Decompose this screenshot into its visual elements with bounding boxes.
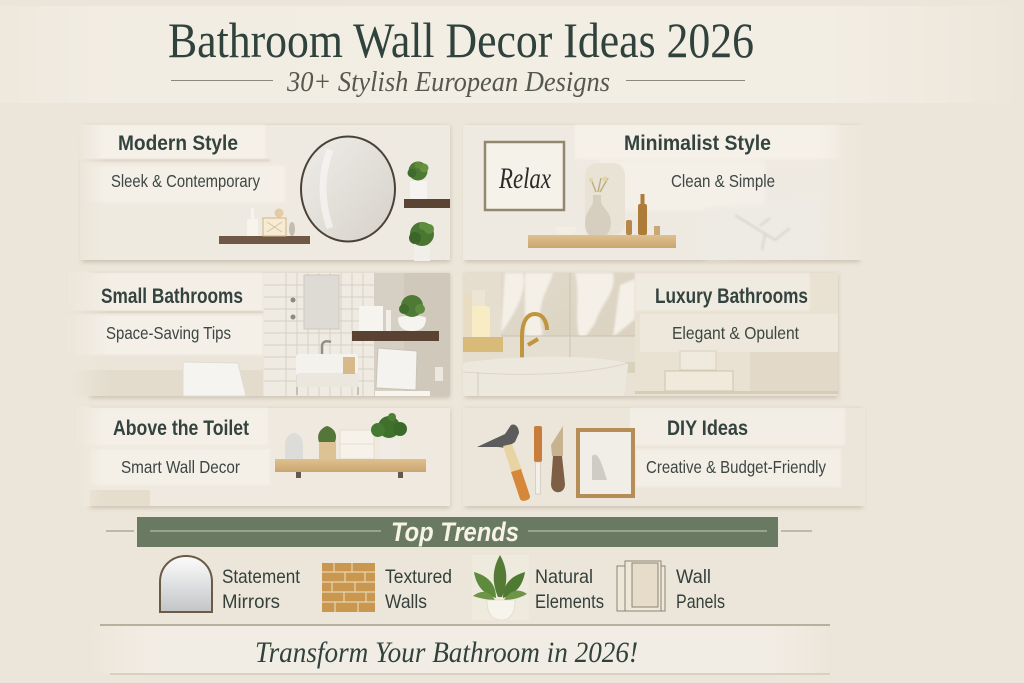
icon: chisel bbox=[534, 426, 542, 494]
icon: hammer bbox=[477, 424, 530, 501]
trend: textured walls: Walls bbox=[385, 591, 427, 613]
candle and gold tray bbox=[463, 290, 503, 352]
icon: white panel left bbox=[183, 362, 246, 396]
icon: arch mirror bbox=[160, 556, 212, 612]
tagline: Clean & Simple bbox=[671, 171, 775, 191]
footer band bbox=[90, 625, 830, 674]
tagline: Smart Wall Decor bbox=[121, 457, 240, 477]
heading: Luxury Bathrooms bbox=[655, 284, 808, 308]
tagline: Space-Saving Tips bbox=[106, 323, 231, 343]
heading: Minimalist Style bbox=[624, 131, 771, 155]
banner heading: Top Trends bbox=[391, 517, 519, 547]
trend: textured walls: Textured bbox=[385, 566, 452, 588]
icon: brick wall bbox=[322, 563, 375, 612]
trend: natural elements: Natural bbox=[535, 566, 593, 588]
heading: DIY Ideas bbox=[667, 416, 748, 440]
heading: Small Bathrooms bbox=[101, 284, 243, 308]
gold tap bbox=[522, 314, 547, 362]
heading: Above the Toilet bbox=[113, 416, 249, 440]
subtitle: 30+ Stylish European Designs bbox=[286, 66, 610, 98]
trend: statement mirrors: Statement bbox=[222, 566, 301, 588]
trend: statement mirrors bbox=[160, 556, 301, 613]
panel: modern style bbox=[80, 125, 450, 262]
icon: potted plant bbox=[472, 555, 529, 620]
title: Bathroom Wall Decor Ideas 2026 bbox=[168, 12, 754, 68]
shelf with plants bbox=[275, 413, 426, 478]
tap base bbox=[503, 362, 533, 367]
trend: natural elements bbox=[472, 555, 604, 620]
icon: round mirror bbox=[301, 136, 395, 242]
boxes bbox=[635, 351, 838, 394]
trend: textured walls bbox=[322, 563, 452, 613]
tagline: Sleek & Contemporary bbox=[111, 171, 260, 191]
section: top trends banner bbox=[106, 517, 812, 547]
trend: wall panels bbox=[617, 561, 725, 613]
tagline: Creative & Budget-Friendly bbox=[646, 457, 826, 477]
icon: top plant bbox=[408, 162, 428, 199]
icon: lower plant bbox=[409, 222, 434, 261]
shelf right bbox=[404, 199, 450, 208]
shelf bbox=[528, 235, 676, 248]
panel: above the toilet bbox=[78, 408, 450, 508]
bathroom scene bbox=[264, 273, 450, 396]
icon: vase and bottles bbox=[556, 176, 660, 235]
trend: natural elements: Elements bbox=[535, 591, 604, 613]
icon: relax frame bbox=[485, 142, 564, 210]
trend: wall panels: Panels bbox=[676, 591, 725, 613]
round bath bbox=[463, 357, 628, 396]
icon: knife bbox=[551, 426, 565, 492]
tagline: Elegant & Opulent bbox=[672, 323, 799, 343]
trend: statement mirrors: Mirrors bbox=[222, 591, 280, 613]
closing line: Transform Your Bathroom in 2026! bbox=[255, 636, 638, 669]
icon: panels bbox=[617, 561, 665, 611]
panel: DIY ideas bbox=[463, 408, 865, 508]
header panel bbox=[0, 6, 1024, 103]
icon: relax frame: Relax bbox=[498, 162, 552, 195]
marble wall bbox=[463, 273, 635, 373]
heading: Modern Style bbox=[118, 131, 238, 155]
panel: luxury bathrooms bbox=[463, 273, 838, 398]
panel: small bathrooms bbox=[70, 273, 450, 398]
shelf with objects bbox=[219, 208, 310, 244]
trend: wall panels: Wall bbox=[676, 566, 711, 588]
icon: picture frame bbox=[578, 430, 633, 496]
panel: minimalist style bbox=[463, 125, 865, 262]
